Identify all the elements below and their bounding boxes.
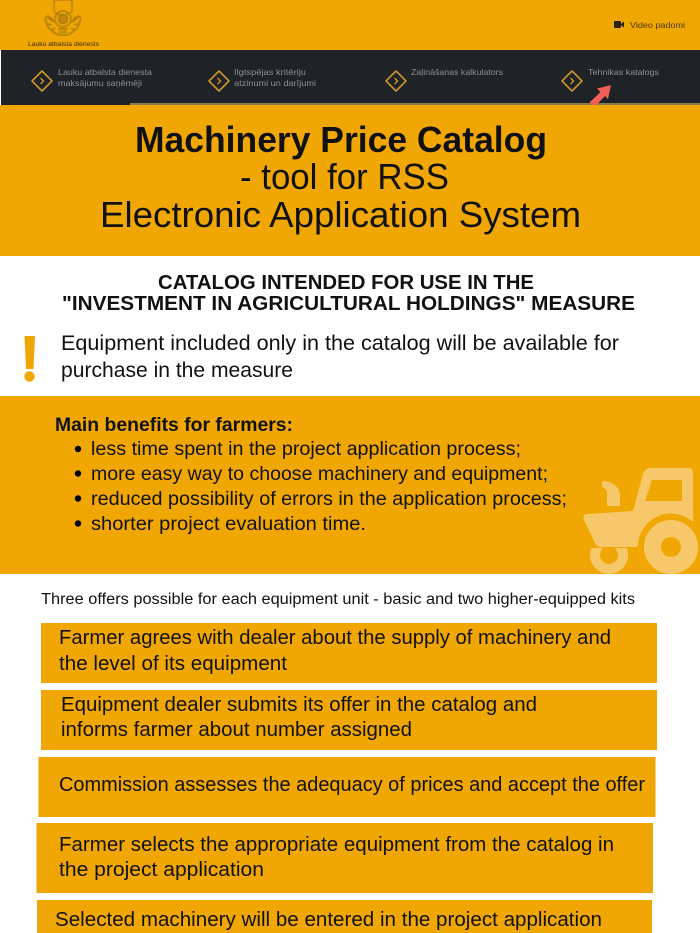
step 1 box: [41, 623, 657, 683]
step 3 box: [38, 757, 656, 817]
text: equipment note: Equipment included only in the catalog will be available for: [61, 331, 619, 355]
step 5 box: Selected machinery will be entered in the project application: [55, 909, 602, 931]
benefits list: shorter project evaluation time.: [91, 513, 366, 535]
benefits list: [75, 438, 567, 535]
step 4 box: Farmer selects the appropriate equipment from the catalog in: [59, 834, 614, 856]
panel: main benefits: [0, 396, 700, 574]
text: equipment note: [61, 331, 619, 382]
nav item: machinery catalog: [562, 67, 659, 91]
step 1 box: Farmer agrees with dealer about the supply of machinery and: [59, 627, 611, 649]
title: [100, 119, 581, 235]
heading: catalog intended: "INVESTMENT IN AGRICULTURAL HOLDINGS" MEASURE: [62, 293, 635, 315]
panel: website header screenshot: [0, 0, 700, 106]
icon: exclamation mark: [24, 336, 35, 382]
step 5 box: [37, 900, 652, 933]
nav item: payments: [32, 67, 152, 91]
text: equipment note: purchase in the measure: [61, 358, 293, 382]
benefits list: less time spent in the project application process;: [91, 438, 521, 460]
benefits heading: Main benefits for farmers:: [55, 415, 293, 436]
nav item: calculator: [386, 67, 503, 91]
nav item: sustainability: [209, 67, 316, 91]
step 2 box: [41, 690, 657, 750]
video link: [614, 21, 685, 30]
nav item: sustainability: Ilgtspējas kritēriju: [234, 67, 306, 77]
logo caption: Lauku atbalsta dienests: [28, 41, 99, 48]
nav item: sustainability: atzinumi un darījumi: [234, 78, 316, 88]
arrow: pointing to catalog: [590, 85, 611, 106]
video link: Video padomi: [630, 21, 685, 30]
icon: coat of arms logo: [45, 0, 81, 35]
heading: catalog intended: [62, 272, 635, 315]
title: Electronic Application System: [100, 194, 581, 235]
nav item: machinery catalog: Tehnikas katalogs: [588, 67, 659, 77]
nav item: calculator: Zaļināšanas kalkulators: [411, 67, 503, 77]
step 4 box: the project application: [59, 859, 264, 881]
panel: title band: [0, 105, 700, 256]
title: - tool for RSS: [240, 156, 449, 197]
step 1 box: the level of its equipment: [59, 653, 287, 675]
title: Machinery Price Catalog: [135, 119, 547, 160]
step 3 box: Commission assesses the adequacy of prices and accept the offer: [59, 774, 645, 796]
nav item: payments: Lauku atbalsta dienesta: [58, 67, 152, 77]
benefits list: reduced possibility of errors in the application process;: [91, 488, 567, 510]
nav item: payments: maksājumu saņēmēji: [58, 78, 142, 88]
icon: tractor: [583, 468, 693, 569]
benefits list: more easy way to choose machinery and equipment;: [91, 463, 548, 485]
step 4 box: [36, 823, 653, 893]
text: three offers: Three offers possible for each equipment unit - basic and two higher-equipped kits: [41, 591, 635, 608]
step 2 box: Equipment dealer submits its offer in the catalog and: [61, 694, 537, 716]
step 2 box: informs farmer about number assigned: [61, 719, 412, 741]
heading: catalog intended: CATALOG INTENDED FOR USE IN THE: [158, 272, 534, 294]
